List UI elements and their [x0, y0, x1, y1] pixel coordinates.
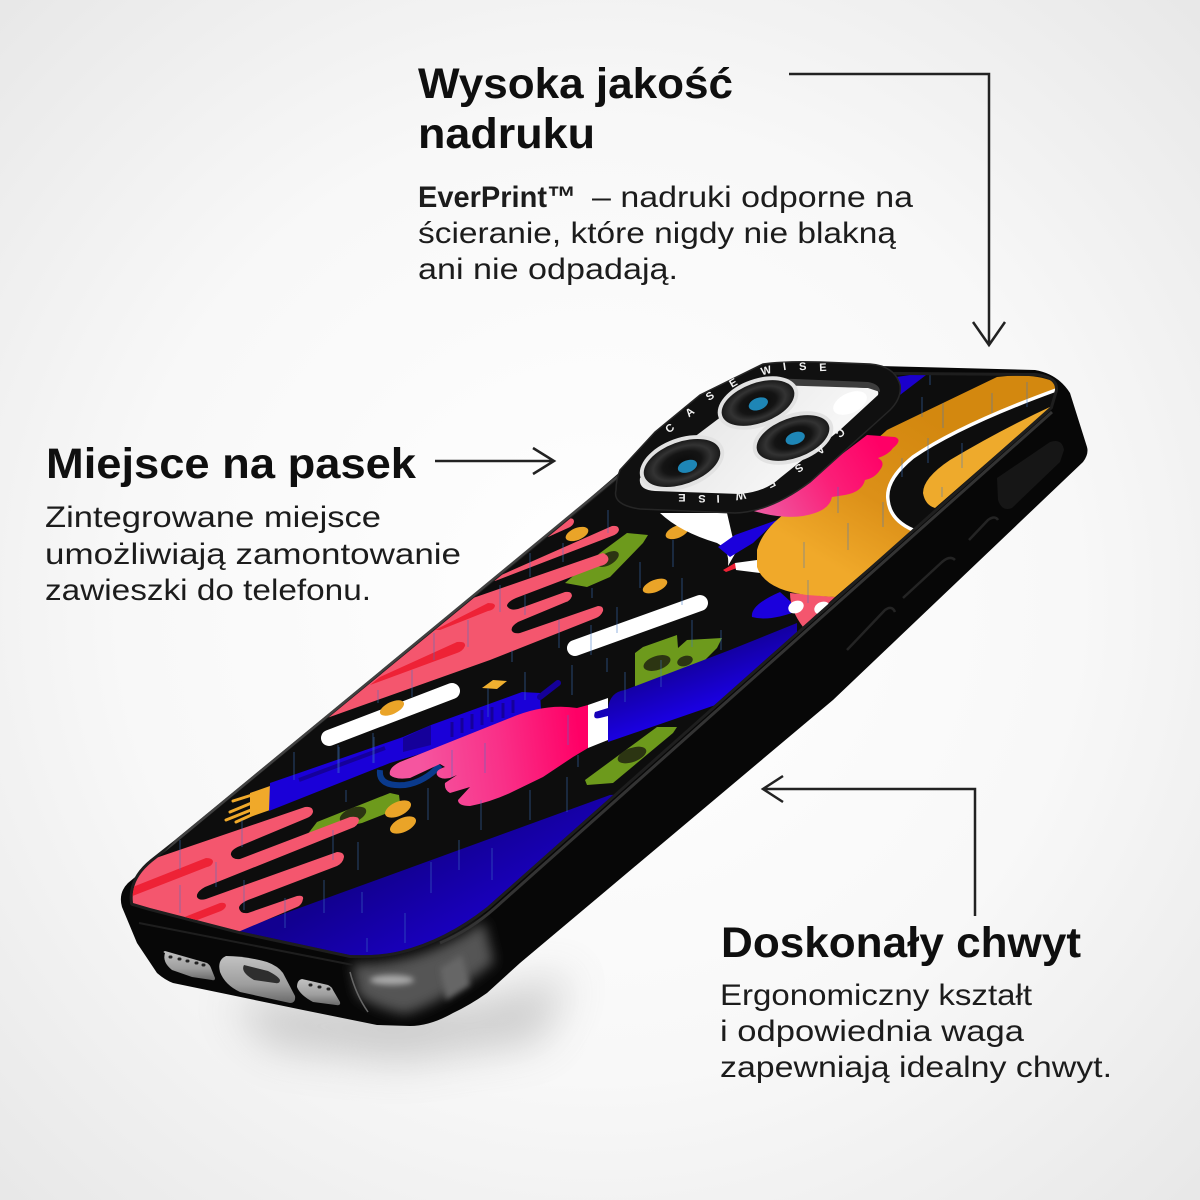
salmon drips lower	[130, 807, 359, 932]
callout: perfect grip	[720, 919, 1112, 1084]
bird lower details	[752, 592, 835, 627]
lens window	[640, 384, 878, 494]
corner gloss	[350, 922, 494, 1014]
phone case illustration	[100, 350, 1100, 1026]
lens left	[632, 424, 732, 502]
bump lettering bottom: E	[678, 491, 686, 503]
gold coins	[378, 522, 690, 837]
callout: print quality	[418, 60, 913, 286]
white bars	[329, 691, 452, 738]
bird collar	[660, 513, 777, 573]
heading	[418, 60, 733, 158]
body text: i odpowiednia waga	[720, 1015, 1024, 1048]
salmon drips upper	[322, 518, 619, 722]
body text	[720, 979, 1112, 1084]
body text: zapewniają idealny chwyt.	[720, 1051, 1112, 1084]
body text	[418, 181, 913, 286]
body text: ścieranie, które nigdy nie blakną	[418, 217, 896, 250]
camera bump	[616, 361, 900, 513]
bump lettering bottom: S	[792, 460, 805, 474]
blue sleeve	[594, 623, 797, 742]
arrow: print quality	[789, 74, 1005, 345]
body text: umożliwiają zamontowanie	[45, 538, 461, 571]
blue bottom band	[238, 794, 614, 956]
arrow: perfect grip	[763, 776, 975, 916]
blue top sliver	[897, 375, 926, 395]
heading: Wysoka jakość	[418, 60, 733, 108]
white bar right	[575, 603, 700, 648]
white cuff	[588, 698, 608, 748]
bump lettering top: S	[799, 361, 807, 373]
flash	[829, 386, 871, 420]
side buttons	[847, 518, 998, 650]
side strap slot	[997, 441, 1064, 509]
bump lettering bottom: E	[765, 476, 777, 490]
body text: zawieszki do telefonu.	[45, 574, 371, 607]
pink wing	[750, 435, 899, 517]
bump lettering bottom: A	[813, 442, 827, 456]
lens top	[710, 366, 806, 440]
bump lettering top: W	[760, 364, 773, 378]
rain streaks	[180, 373, 1027, 952]
bump lettering top: I	[782, 361, 787, 373]
green note lower right	[585, 727, 677, 785]
red stripes lower	[130, 858, 213, 897]
bottom speaker left	[164, 951, 215, 980]
pink hand	[390, 705, 588, 806]
rim highlight	[138, 473, 622, 883]
gold inner	[923, 406, 1052, 508]
bump lettering top: C	[663, 421, 677, 436]
body text: – nadruki odporne na	[592, 181, 913, 214]
white swoosh	[888, 390, 1056, 530]
arrow: strap slot	[435, 448, 554, 474]
heading: Doskonały chwyt	[721, 919, 1081, 967]
body text: Zintegrowane miejsce	[45, 501, 381, 534]
inner lip	[770, 378, 880, 392]
case body	[121, 364, 1088, 1026]
green note top	[565, 533, 648, 587]
bump lettering bottom: S	[698, 492, 706, 504]
bump lettering top: E	[727, 376, 740, 390]
gold body	[757, 376, 1060, 597]
bump lettering bottom	[678, 425, 847, 504]
rim	[133, 374, 1055, 955]
bump lettering top: E	[819, 362, 827, 374]
body text: ani nie odpadają.	[418, 253, 678, 286]
gold diamond	[482, 680, 507, 689]
phone shadow	[230, 975, 570, 1060]
charging port	[219, 956, 295, 1003]
gold coin behind drip	[566, 526, 588, 542]
bump lettering bottom: C	[833, 425, 847, 439]
bump lettering top	[663, 361, 827, 436]
bump lettering bottom: I	[716, 492, 720, 504]
green note right	[635, 635, 722, 690]
red stripes	[435, 603, 495, 630]
rim highlight right	[440, 412, 1052, 943]
bump lettering bottom: W	[734, 488, 747, 502]
body text: Ergonomiczny kształt	[720, 979, 1033, 1012]
lens right	[745, 401, 841, 475]
heading: nadruku	[418, 110, 595, 158]
blue knife	[269, 683, 558, 811]
gold brush tip	[226, 786, 270, 822]
bump lettering top: A	[683, 405, 697, 420]
lower face edge	[139, 923, 353, 965]
body text	[45, 501, 461, 607]
heading: Miejsce na pasek	[46, 440, 416, 488]
callout: strap slot	[45, 440, 461, 607]
printed artwork	[132, 375, 1056, 956]
body text: EverPrint™	[418, 181, 576, 214]
green note lower left	[307, 793, 400, 835]
bump lettering top: S	[704, 390, 717, 404]
navy crescent	[380, 765, 440, 785]
bottom speaker right	[297, 979, 340, 1005]
